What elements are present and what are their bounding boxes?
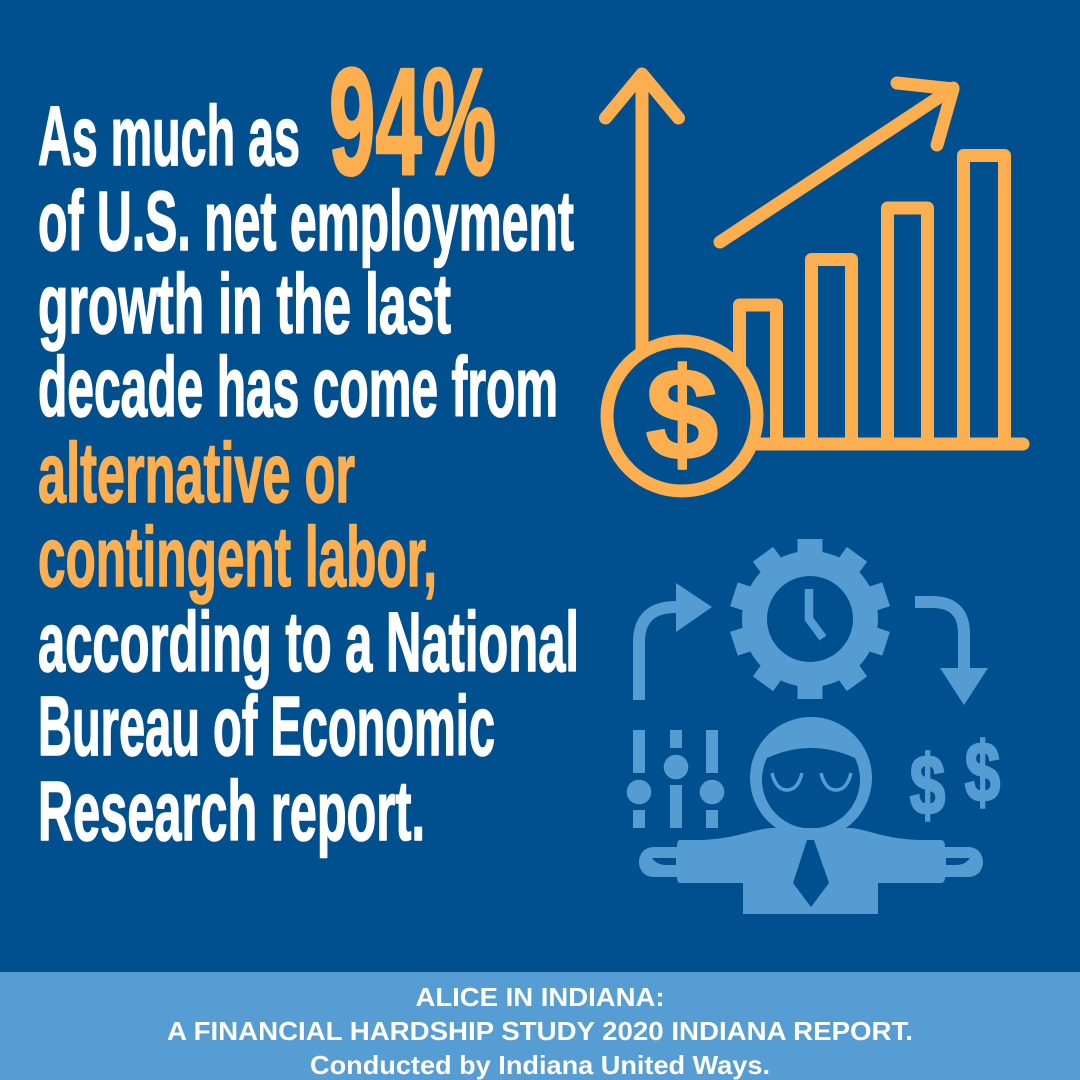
highlighted line: contingent labor: contingent labor, xyxy=(38,510,437,604)
footer line 1: ALICE IN INDIANA: xyxy=(416,982,664,1012)
curved arrow: right xyxy=(915,602,988,705)
big statistic: 94%: 94% xyxy=(329,37,496,207)
dollar coin: $ xyxy=(646,341,718,487)
headline line 9: Research report. xyxy=(38,764,425,858)
slider controls xyxy=(627,730,724,828)
businessman figure xyxy=(639,717,983,914)
icon: businessman balancing time and money xyxy=(627,539,1000,914)
dollar signs: $ xyxy=(965,724,1000,819)
headline line 4: decade has come from xyxy=(38,340,558,434)
headline text block xyxy=(38,37,579,858)
headline line 7: according to a National xyxy=(38,595,579,689)
bars and baseline xyxy=(740,156,1023,444)
vertical axis arrow xyxy=(606,74,678,350)
headline line: as much as: As much as xyxy=(38,89,300,183)
gear with clock xyxy=(730,539,890,699)
rising trend arrow xyxy=(720,83,953,242)
icon: growth bar chart with dollar coin xyxy=(606,74,1023,491)
dollar signs: $ xyxy=(910,737,945,832)
headline line 8: Bureau of Economic xyxy=(38,679,495,773)
highlighted line: alternative or: alternative or xyxy=(38,426,355,520)
curved arrow: left xyxy=(639,583,712,700)
headline line 2: of U.S. net employment xyxy=(38,174,574,268)
headline line 3: growth in the last xyxy=(38,257,451,351)
footer band xyxy=(0,972,1080,1080)
dollar signs xyxy=(910,724,1000,832)
footer line 2: A FINANCIAL HARDSHIP STUDY 2020 INDIANA REPORT. xyxy=(167,1016,913,1046)
footer line 3: Conducted by Indiana United Ways. xyxy=(310,1050,770,1080)
dollar coin xyxy=(607,341,757,491)
